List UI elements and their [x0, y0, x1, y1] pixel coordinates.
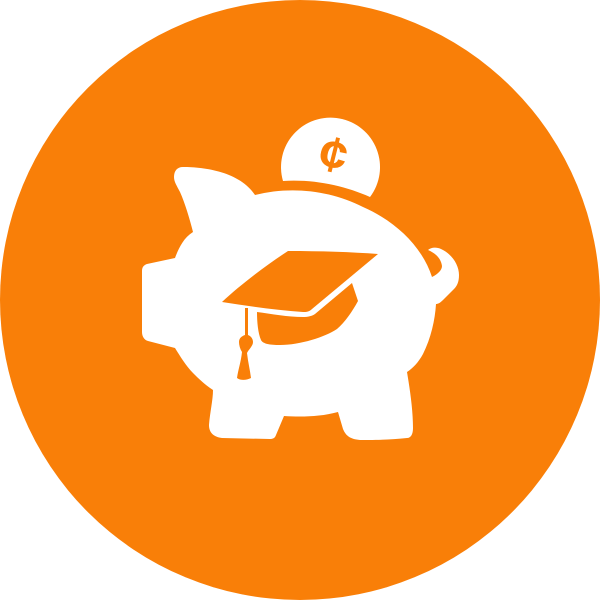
- cap mortarboard: [222, 251, 378, 312]
- icon: coin with cent sign: ¢: [313, 124, 354, 185]
- icon: coin with cent sign: [281, 118, 380, 197]
- icon: graduation cap: [222, 251, 378, 380]
- icon: piggy bank body: [142, 167, 459, 440]
- cap base: [257, 283, 358, 345]
- tassel: [237, 308, 253, 380]
